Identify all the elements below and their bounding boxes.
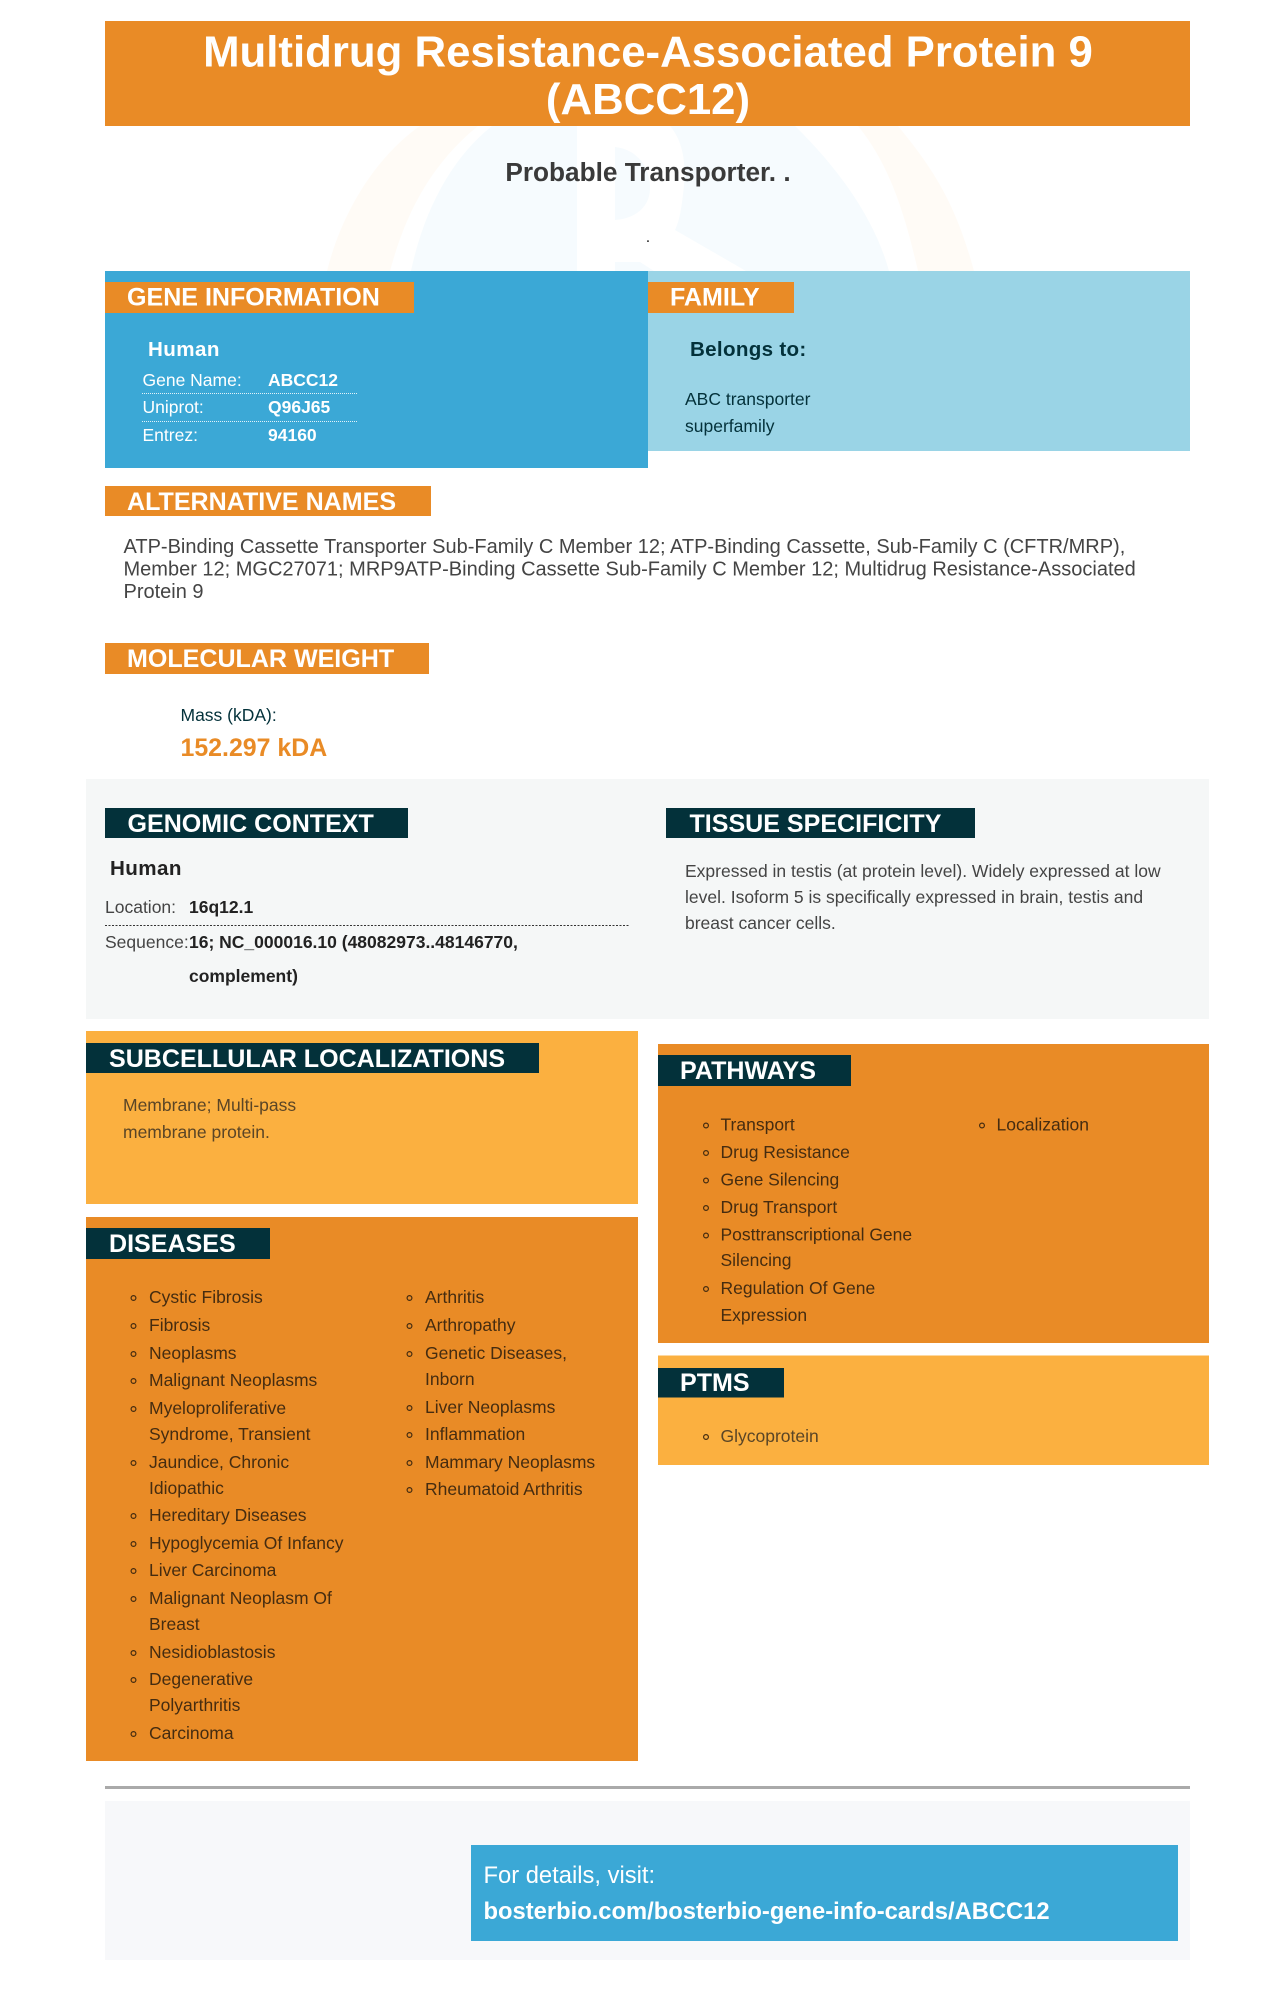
location row: Location: xyxy=(105,897,176,917)
uniprot row: Q96J65 xyxy=(268,397,331,417)
localization text xyxy=(123,1095,296,1142)
title banner: (ABCC12) xyxy=(546,75,750,124)
disease list column 2: Arthropathy xyxy=(425,1315,516,1335)
tissue specificity text: level. Isoform 5 is specifically expressed in brain, testis and xyxy=(685,887,1143,907)
sequence row xyxy=(105,932,518,986)
pathway list column 1: Drug Transport xyxy=(720,1197,837,1217)
heading: ptms xyxy=(658,1368,784,1398)
panel: family xyxy=(648,271,1190,451)
disease list column 2: Liver Neoplasms xyxy=(425,1397,556,1417)
tissue specificity text xyxy=(685,861,1161,933)
disease list column 1: Breast xyxy=(149,1614,200,1634)
ptm list: Glycoprotein xyxy=(720,1426,819,1446)
panel: diseases xyxy=(86,1217,638,1761)
entrez row xyxy=(142,425,317,445)
pathway list column 2: Localization xyxy=(996,1114,1089,1134)
disease list column 2: Inflammation xyxy=(425,1424,525,1444)
alternative names text xyxy=(124,536,1136,603)
family text: ABC transporter xyxy=(685,389,811,409)
entrez row: 94160 xyxy=(268,425,317,445)
heading: diseases: DISEASES xyxy=(109,1230,236,1258)
footer panel xyxy=(105,1801,1190,1960)
disease list column 1: Jaundice, Chronic xyxy=(149,1452,289,1472)
panel: ptms xyxy=(658,1356,1209,1465)
disease list column 2: Rheumatoid Arthritis xyxy=(425,1479,583,1499)
mass label: Mass (kDA): xyxy=(180,705,277,725)
disease list column 2: Inborn xyxy=(425,1369,475,1389)
pathway list column 1: Drug Resistance xyxy=(720,1142,850,1162)
location row xyxy=(105,897,253,917)
heading: tissue specificity: TISSUE SPECIFICITY xyxy=(690,810,942,838)
uniprot row xyxy=(142,397,331,417)
heading: genomic context: GENOMIC CONTEXT xyxy=(128,810,374,838)
gene name row: Gene Name: xyxy=(142,370,242,390)
disease list column 1: Neoplasms xyxy=(149,1343,237,1363)
mass value: 152.297 kDA xyxy=(180,734,327,762)
disease list column 1: Myeloproliferative xyxy=(149,1398,286,1418)
pathway list column 1: Gene Silencing xyxy=(720,1170,839,1190)
pathway list column 1: Posttranscriptional Gene xyxy=(720,1224,912,1244)
title banner xyxy=(105,21,1190,126)
heading: family: FAMILY xyxy=(670,284,760,312)
disease list column 2 xyxy=(407,1287,595,1499)
gene name row xyxy=(142,370,338,390)
watermark logo xyxy=(327,126,974,271)
sequence row: Sequence: xyxy=(105,932,189,952)
family text xyxy=(685,389,811,436)
disease list column 1: Polyarthritis xyxy=(149,1695,241,1715)
disease list column 1: Liver Carcinoma xyxy=(149,1560,277,1580)
small dot: . xyxy=(646,229,650,246)
tissue specificity text: Expressed in testis (at protein level). Widely expressed at low xyxy=(685,861,1161,881)
pathway list column 1 xyxy=(704,1114,912,1325)
disease list column 1: Hereditary Diseases xyxy=(149,1505,307,1525)
disease list column 2: Arthritis xyxy=(425,1287,485,1307)
panel: pathways xyxy=(658,1044,1209,1343)
callout: details link: For details, visit: xyxy=(484,1862,655,1889)
alternative names text: ATP-Binding Cassette Transporter Sub-Family C Member 12; ATP-Binding Cassette, Sub-Family C (CFTR/MRP), xyxy=(124,536,1125,558)
disease list column 1: Carcinoma xyxy=(149,1723,234,1743)
pathway list column 1: Silencing xyxy=(720,1250,792,1270)
disease list column 1: Syndrome, Transient xyxy=(149,1424,311,1444)
heading: alternative names: ALTERNATIVE NAMES xyxy=(127,488,396,516)
disease list column 2: Genetic Diseases, xyxy=(425,1343,567,1363)
disease list column 1 xyxy=(131,1287,344,1743)
localization text: membrane protein. xyxy=(123,1122,270,1142)
callout: details link xyxy=(471,1845,1178,1941)
disease list column 1: Malignant Neoplasms xyxy=(149,1370,318,1390)
alternative names text: Member 12; MGC27071; MRP9ATP-Binding Cassette Sub-Family C Member 12; Multidrug Resistance-Associated xyxy=(124,558,1136,580)
uniprot row: Uniprot: xyxy=(142,397,204,417)
heading: pathways xyxy=(658,1055,851,1086)
heading: molecular weight: MOLECULAR WEIGHT xyxy=(127,645,395,673)
entrez row: Entrez: xyxy=(142,425,198,445)
panel: genomic context and tissue specificity xyxy=(86,779,1209,1019)
heading: family xyxy=(648,282,794,313)
disease list column 1: Idiopathic xyxy=(149,1478,224,1498)
species: Human xyxy=(148,338,220,361)
disease list column 1: Cystic Fibrosis xyxy=(149,1287,263,1307)
tissue specificity text: breast cancer cells. xyxy=(685,913,836,933)
localization text: Membrane; Multi-pass xyxy=(123,1095,296,1115)
panel: subcellular localizations xyxy=(86,1031,638,1204)
disease list column 1: Fibrosis xyxy=(149,1315,211,1335)
heading: diseases xyxy=(86,1228,270,1259)
disease list column 1: Hypoglycemia Of Infancy xyxy=(149,1533,344,1553)
disease list column 1: Degenerative xyxy=(149,1669,253,1689)
sequence row: 16; NC_000016.10 (48082973..48146770, xyxy=(189,932,518,952)
title banner: Multidrug Resistance-Associated Protein 9 xyxy=(203,28,1093,76)
pathway list column 1: Regulation Of Gene xyxy=(720,1278,875,1298)
location row: 16q12.1 xyxy=(189,897,253,917)
sequence row: complement) xyxy=(189,966,298,986)
callout: details link: bosterbio.com/bosterbio-gene-info-cards/ABCC12 xyxy=(484,1898,1050,1925)
subtitle: Probable Transporter. . xyxy=(505,157,791,187)
gene name row: ABCC12 xyxy=(268,370,338,390)
heading: gene information: GENE INFORMATION xyxy=(127,284,380,312)
genomic species: Human xyxy=(110,857,182,880)
alternative names text: Protein 9 xyxy=(124,581,204,603)
disease list column 1: Malignant Neoplasm Of xyxy=(149,1588,332,1608)
pathway list column 1: Expression xyxy=(720,1305,807,1325)
disease list column 1: Nesidioblastosis xyxy=(149,1642,276,1662)
heading: subcellular localizations: SUBCELLULAR LOCALIZATIONS xyxy=(109,1045,505,1073)
disease list column 2: Mammary Neoplasms xyxy=(425,1452,595,1472)
heading: ptms: PTMS xyxy=(680,1369,750,1397)
panel: gene information xyxy=(105,271,648,468)
heading: pathways: PATHWAYS xyxy=(680,1057,816,1085)
family text: superfamily xyxy=(685,416,775,436)
pathway list column 1: Transport xyxy=(720,1114,795,1134)
belongs to label: Belongs to: xyxy=(690,338,807,361)
